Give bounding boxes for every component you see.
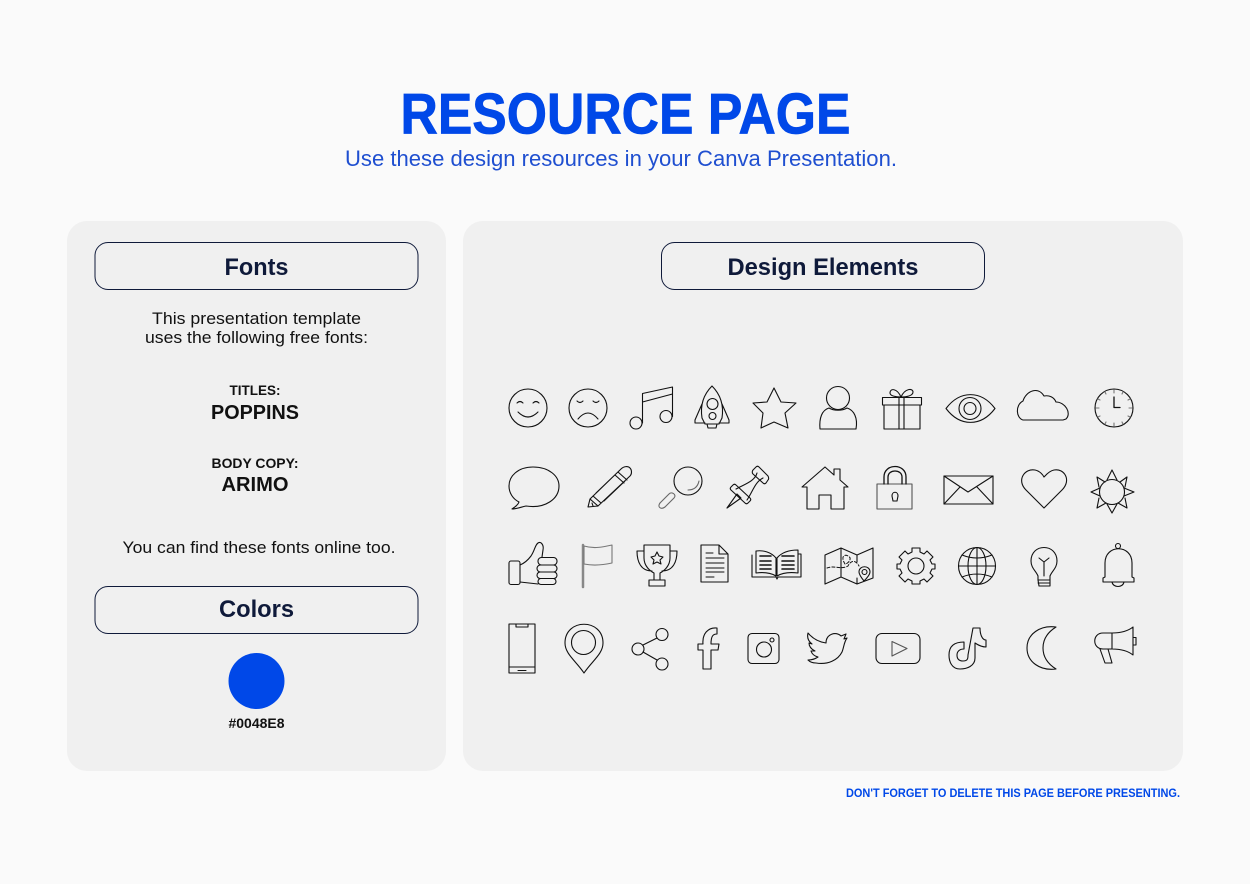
icon: facebook	[698, 628, 719, 669]
icon: youtube	[876, 634, 920, 664]
heading: design elements: Design Elements	[728, 254, 918, 281]
icon: envelope	[944, 476, 993, 504]
icon: open book	[752, 550, 801, 579]
icon: gift	[882, 389, 922, 429]
title: RESOURCE PAGE	[400, 82, 850, 146]
heading: colors	[95, 586, 418, 634]
icon: twitter	[808, 633, 847, 663]
fonts intro text: This presentation template	[152, 309, 361, 328]
icon: clock	[1095, 389, 1133, 427]
body copy font: ARIMO	[222, 474, 288, 496]
heading: fonts: Fonts	[224, 254, 288, 281]
icon: bell	[1103, 544, 1134, 586]
heading: fonts	[95, 242, 418, 290]
icon: cloud	[1017, 391, 1068, 420]
icon: map	[825, 548, 873, 584]
icon: sun	[1091, 470, 1134, 513]
titles font: TITLES:	[230, 382, 280, 398]
icon: rocket	[695, 386, 729, 428]
icon: lock	[877, 466, 912, 509]
heading: colors: Colors	[219, 596, 294, 623]
icon: tiktok	[949, 628, 986, 669]
icon: moon	[1027, 627, 1056, 669]
icon: heart	[1022, 470, 1067, 508]
icon: star	[753, 388, 796, 428]
fonts note: You can find these fonts online too.	[122, 538, 396, 557]
icon: thumbs up	[509, 542, 557, 584]
icon: light bulb	[1031, 548, 1057, 586]
icon: globe	[958, 548, 996, 584]
icon: magnifier	[659, 467, 702, 508]
titles font: POPPINS	[211, 402, 299, 424]
icon: gear	[897, 548, 935, 584]
titles font	[211, 382, 299, 424]
heading: design elements	[662, 242, 984, 290]
icon: location pin	[565, 624, 603, 673]
icon: pencil	[588, 467, 632, 507]
icon: smile	[509, 389, 547, 427]
icon: phone	[509, 624, 535, 673]
footer note: DON'T FORGET TO DELETE THIS PAGE BEFORE PRESENTING.	[846, 786, 1180, 800]
icon: music notes	[630, 387, 672, 429]
icon: sad face	[569, 389, 607, 427]
body copy font: BODY COPY:	[212, 455, 298, 471]
icon: trophy	[637, 545, 677, 586]
icon: share	[632, 628, 668, 670]
color swatch	[228, 653, 284, 709]
icon: flag	[583, 545, 612, 587]
icon: house	[802, 467, 848, 509]
icon: megaphone	[1095, 627, 1136, 663]
icon: person	[820, 386, 857, 429]
body copy font	[212, 455, 298, 496]
icon: eye	[946, 395, 995, 422]
icon: instagram	[748, 634, 779, 664]
color hex label: #0048E8	[228, 716, 285, 731]
fonts intro text	[145, 309, 368, 347]
subtitle: Use these design resources in your Canva Presentation.	[345, 146, 897, 171]
icon: push pin	[727, 466, 769, 508]
panel: design elements	[463, 221, 1183, 771]
icon: speech bubble	[509, 467, 559, 509]
fonts intro text: uses the following free fonts:	[145, 328, 368, 347]
panel: fonts and colors	[67, 221, 446, 771]
icon: document	[701, 545, 728, 582]
